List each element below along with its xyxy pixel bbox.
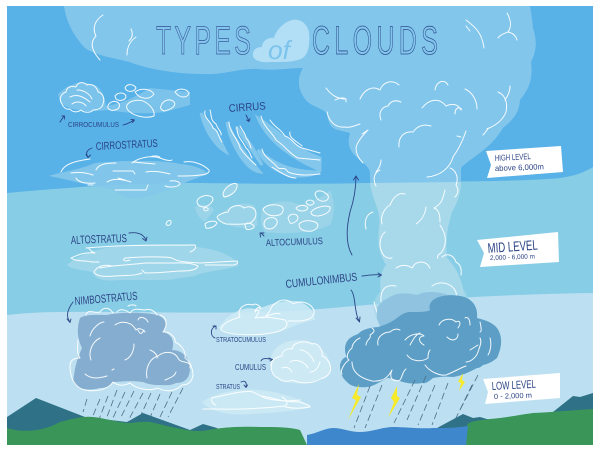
cloud: cumulus xyxy=(270,340,331,383)
ground: left mountains xyxy=(7,398,230,445)
lightning middle xyxy=(388,386,400,418)
flag: mid level xyxy=(477,232,559,267)
cumulonimbus column outlines xyxy=(374,225,464,324)
cloud: altocumulus xyxy=(166,183,334,233)
label: cumulonimbus with arrows: CUMULONIMBUS xyxy=(285,271,358,291)
title xyxy=(156,19,438,65)
title: of cloud xyxy=(253,20,309,65)
flag: high level: above 6,000m xyxy=(495,162,544,173)
title: TYPES xyxy=(156,19,251,64)
label: altocumulus: ALTOCUMULUS xyxy=(266,236,323,249)
flag: low level: 0 - 2,000 m xyxy=(494,391,532,401)
ground: left hills xyxy=(7,417,307,445)
column lower overlay xyxy=(374,283,470,320)
sky: mid level band xyxy=(7,167,593,445)
label: altostratus: ALTOSTRATUS xyxy=(71,233,127,247)
lightning left xyxy=(348,384,361,420)
cloud: cumulonimbus column xyxy=(370,182,465,300)
label: cirrostratus xyxy=(86,138,158,158)
ground: right mountains xyxy=(437,393,593,430)
label: cirrocumulus xyxy=(60,116,134,129)
label: cumulonimbus with arrows xyxy=(285,176,382,322)
flag: low level xyxy=(483,373,560,404)
label: cirrocumulus: CIRROCUMULUS xyxy=(68,120,119,129)
cloud: stratocumulus xyxy=(218,300,315,335)
label: cumulus: CUMULUS xyxy=(235,363,266,372)
rain: cumulonimbus xyxy=(354,375,478,428)
sky: low level band xyxy=(7,293,593,445)
flag: high level xyxy=(486,146,563,178)
label: nimbostratus: NIMBOSTRATUS xyxy=(74,291,138,308)
cloud: nimbostratus xyxy=(70,305,193,391)
label: cumulus xyxy=(235,358,272,372)
anvil white outlines xyxy=(92,13,517,229)
label: nimbostratus xyxy=(67,291,138,322)
title: of cloud: of xyxy=(268,35,293,65)
flag: mid level: 2,000 - 6,000 m xyxy=(490,253,535,262)
title: CLOUDS xyxy=(312,19,438,64)
cloud: altostratus xyxy=(67,244,238,281)
water: lake xyxy=(307,426,468,445)
cloud: stratus xyxy=(202,390,311,414)
flag: high level: HIGH LEVEL xyxy=(495,151,531,163)
label: stratocumulus xyxy=(211,326,266,344)
label: cirrus: CIRRUS xyxy=(228,100,266,115)
cloud: giant cumulonimbus anvil xyxy=(64,6,536,183)
flag: low level: LOW LEVEL xyxy=(492,379,536,393)
rain: nimbostratus xyxy=(83,388,183,425)
flag: mid level: MID LEVEL xyxy=(487,237,538,256)
label: stratus: STRATUS xyxy=(216,382,240,391)
ground: right hills xyxy=(466,409,593,445)
label: altocumulus xyxy=(260,233,323,249)
cloud: cumulonimbus storm base xyxy=(340,292,501,387)
label: stratocumulus: STRATOCUMULUS xyxy=(216,335,266,344)
cloud: cirrostratus xyxy=(49,156,209,198)
lightning right xyxy=(458,373,465,391)
label: cirrostratus: CIRROSTRATUS xyxy=(96,138,158,153)
label: cirrus xyxy=(228,100,266,122)
cloud: cirrus xyxy=(201,110,320,178)
cloud: cirrocumulus xyxy=(58,83,190,117)
lightning bolts xyxy=(348,373,465,420)
